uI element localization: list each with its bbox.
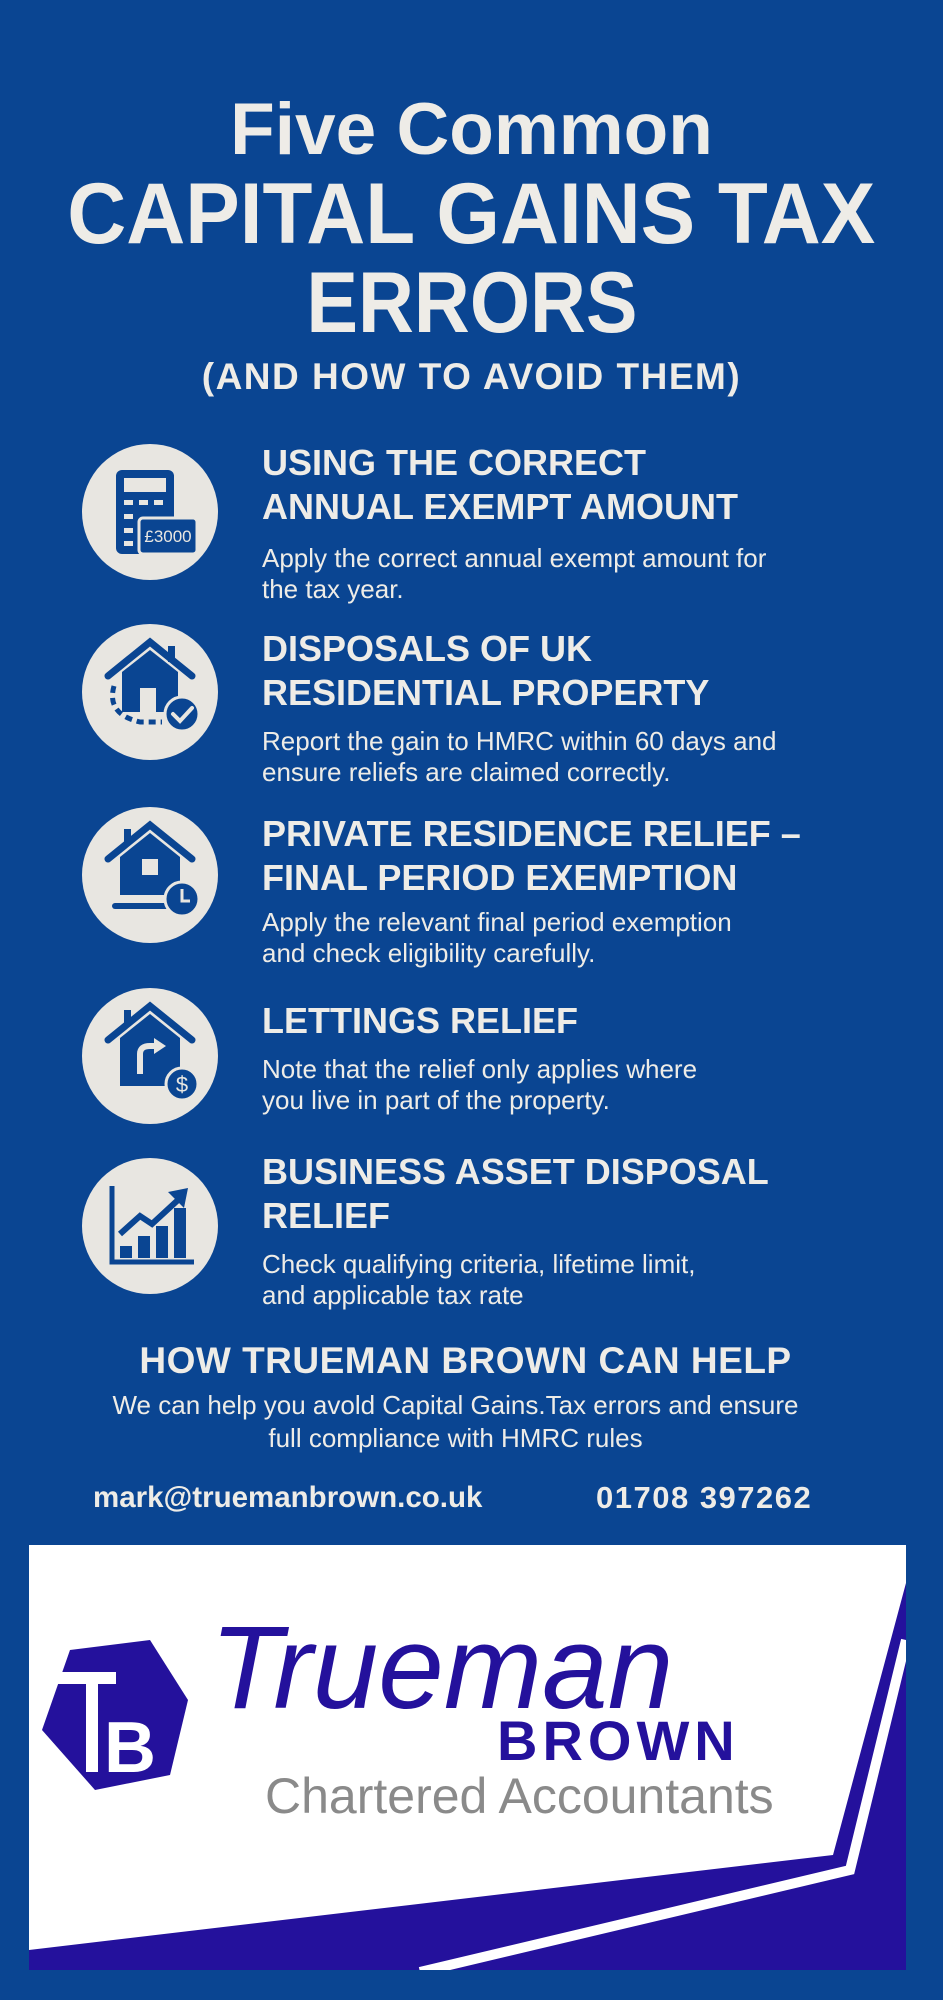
heading 2: RESIDENTIAL PROPERTY [262, 672, 709, 713]
body 5: and applicable tax rate [262, 1280, 524, 1310]
heading 5: BUSINESS ASSET DISPOSAL [262, 1151, 769, 1192]
swoosh [29, 1583, 906, 1972]
body 1: Apply the correct annual exempt amount for [262, 543, 766, 573]
body 4: Note that the relief only applies where [262, 1054, 697, 1084]
icon: TB hexagon [42, 1640, 188, 1790]
subtitle: (AND HOW TO AVOID THEM) [202, 356, 741, 397]
body 2: Report the gain to HMRC within 60 days and [262, 726, 776, 756]
icon: house with arrow and dollar [82, 988, 218, 1124]
title: five common: Five Common [230, 89, 713, 170]
contact: phone: 01708 397262 [596, 1480, 812, 1515]
help text: full compliance with HMRC rules [268, 1423, 643, 1453]
help text: We can help you avold Capital Gains.Tax errors and ensure [112, 1390, 798, 1420]
icon: growth chart [82, 1158, 218, 1294]
body 3 [262, 907, 732, 968]
body 4: you live in part of the property. [262, 1085, 610, 1115]
heading 4: LETTINGS RELIEF [262, 1000, 578, 1041]
body 3: Apply the relevant final period exemption [262, 907, 732, 937]
heading 2 [262, 628, 709, 713]
body 2: ensure reliefs are claimed correctly. [262, 757, 670, 787]
heading 1 [262, 442, 738, 527]
body 1 [262, 543, 766, 604]
icon: house with check [82, 624, 218, 760]
heading: how trueman brown can help: HOW TRUEMAN BROWN CAN HELP [139, 1340, 792, 1381]
body 2 [262, 726, 776, 787]
icon: calculator [82, 444, 218, 580]
icon: TB hexagon: B [104, 1708, 156, 1788]
heading 1: USING THE CORRECT [262, 442, 646, 483]
heading 5 [262, 1151, 769, 1236]
body 5: Check qualifying criteria, lifetime limit, [262, 1249, 695, 1279]
heading 2: DISPOSALS OF UK [262, 628, 592, 669]
body 3: and check eligibility carefully. [262, 938, 595, 968]
icon: house with clock [82, 807, 218, 943]
heading 3: PRIVATE RESIDENCE RELIEF – [262, 813, 801, 854]
logo text: BROWN: BROWN [497, 1709, 740, 1772]
contact: email: mark@truemanbrown.co.uk [93, 1481, 482, 1514]
logo text: Trueman: Trueman [210, 1602, 673, 1734]
heading 3: FINAL PERIOD EXEMPTION [262, 857, 737, 898]
body 5 [262, 1249, 695, 1310]
heading 5: RELIEF [262, 1195, 390, 1236]
body 1: the tax year. [262, 574, 404, 604]
title: errors: ERRORS [306, 255, 637, 351]
heading 3 [262, 813, 801, 898]
logo text: Chartered Accountants: Chartered Accountants [265, 1768, 774, 1824]
icon: calculator: £3000 [144, 527, 192, 546]
help text [112, 1390, 798, 1453]
title: capital gains tax: CAPITAL GAINS TAX [68, 166, 875, 262]
logo panel [29, 1545, 906, 1970]
icon: house with arrow and dollar: $ [176, 1072, 188, 1097]
body 4 [262, 1054, 697, 1115]
heading 1: ANNUAL EXEMPT AMOUNT [262, 486, 738, 527]
